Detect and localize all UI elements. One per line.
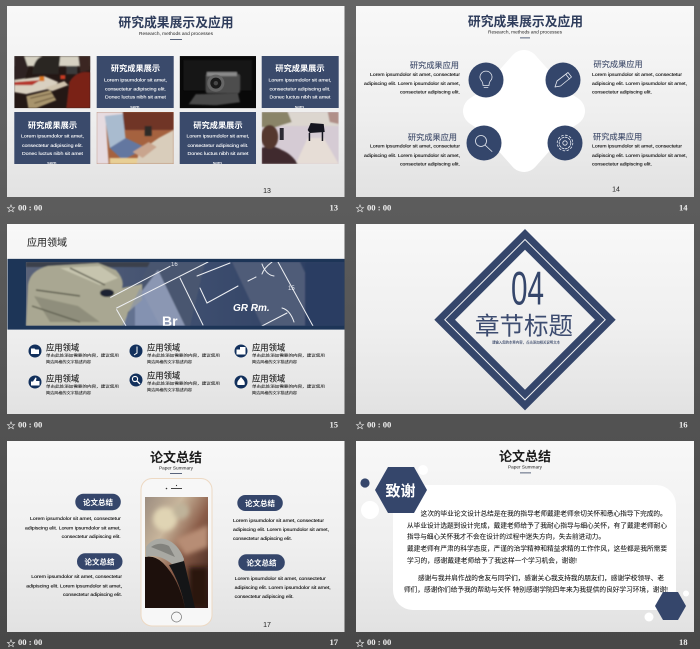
pill: upper right: 论文总结 — [245, 498, 275, 508]
text block: lower right: consectetur adipiscing elit. — [592, 162, 652, 168]
slide 13 subtitle: Research, methods and processes — [139, 31, 213, 36]
card: result 4: Donec luctus nibh sit amet — [188, 151, 249, 157]
slide 13 page number: 13 — [263, 188, 271, 195]
slide 18 footer: 00 : 00 — [367, 637, 391, 647]
pill: lower left — [77, 553, 122, 570]
card: result 3: Donec luctus nibh sit amet — [22, 151, 84, 157]
slide 17 subtitle: Paper Summary — [159, 466, 194, 470]
slide 13 footer — [7, 202, 338, 212]
banner photo: hand drawing floor plan: GR Rm. — [233, 303, 270, 314]
text block: lower left: Lorem ipsumdolor sit amet, consectetur — [31, 574, 122, 580]
text block: upper right — [233, 518, 329, 542]
acknowledgement text: 师们，感谢你们给予我的帮助与关怀 特别感谢学院四年来为我提供的良好学习环境，谢谢! — [404, 585, 668, 594]
decorative circle: lower white — [644, 612, 654, 622]
slide 18 — [356, 441, 694, 632]
slide 15 footer: 00 : 00 — [18, 420, 42, 430]
slide 13 footer: 13 — [330, 202, 338, 212]
text block: upper left — [364, 60, 460, 96]
pill: upper left: 论文总结 — [83, 497, 113, 507]
slide 16 footer — [356, 420, 688, 430]
hexagon badge: thanks — [375, 467, 427, 513]
text block: lower right: Lorem ipsumdolor sit amet, consectetur — [592, 144, 682, 150]
item: folder — [28, 342, 120, 364]
icon: gear — [548, 126, 582, 160]
hexagon: lower right — [655, 592, 686, 620]
slide 18 subtitle: Paper Summary — [508, 464, 543, 470]
card: result 1: Lorem ipsumdolor sit amet, — [104, 78, 167, 84]
slide 13 background — [7, 6, 344, 197]
slide 16 footer: 16 — [679, 420, 688, 430]
slide 14 page number: 14 — [612, 186, 620, 194]
pill: lower left: 论文总结 — [84, 556, 115, 566]
pill: upper left — [75, 494, 121, 510]
acknowledgement text: 从毕业设计选题到设计完成，戴建老师给予了我耐心指导与细心关怀，有了戴建老师耐心 — [407, 520, 668, 529]
white text panel — [393, 485, 676, 610]
slide 14 footer: 14 — [679, 202, 688, 212]
banner photo: hand drawing floor plan: Br — [162, 313, 178, 329]
slide 16 — [356, 224, 694, 414]
card: result 1: consectetur adipiscing elit. — [105, 86, 166, 92]
slide 14 title: 研究成果展示及应用 — [468, 14, 583, 29]
card: result 1: Donec luctus nibh sit amet — [105, 94, 167, 100]
text block: lower left: Lorem ipsumdolor sit amet, consectetur — [370, 144, 460, 150]
item: money bag — [234, 374, 326, 395]
item: clock: 单击此处添加需要的内容，建议您用 — [147, 352, 221, 358]
slide 17 footer — [7, 637, 339, 647]
card: result 1 — [97, 56, 174, 110]
banner photo: hand drawing floor plan: 16 — [171, 262, 178, 268]
decorative circle: white small — [418, 465, 428, 475]
decorative circle: right white — [683, 590, 689, 596]
text block: upper left: consectetur adipiscing elit. — [400, 90, 460, 96]
pill: lower right — [238, 554, 285, 571]
acknowledgement text: 这次的毕业论文设计总结是在我的指导老师戴建老师亲切关怀和悉心指导下完成的。 — [421, 509, 667, 518]
item: factory: 应用领域 — [252, 342, 285, 352]
text block: lower right — [592, 132, 687, 168]
slide 14 background — [356, 6, 694, 197]
slide 13 — [7, 6, 344, 197]
text block: lower left: consectetur adipiscing elit. — [400, 162, 460, 168]
slide 14 — [356, 6, 694, 197]
pill: lower right: 论文总结 — [246, 558, 277, 568]
slide 14 title underline — [520, 36, 530, 39]
slide 15 footer — [7, 420, 338, 430]
banner photo: hand drawing floor plan — [8, 258, 344, 330]
card: result 2: Lorem ipsumdolor sit amet, — [268, 78, 332, 84]
card: result 2 — [262, 56, 339, 110]
chapter subtitle: 请输入您的本章内容，点击添加相关说明文本 — [492, 340, 560, 344]
text block: upper right: consectetur adipiscing elit. — [592, 90, 652, 96]
item: money bag: 单击此处添加需要的内容，建议您用 — [252, 384, 326, 388]
text block: upper right: adipiscing elit. Lorem ipsumdolor sit amet, — [233, 527, 329, 533]
text block: upper right: 研究成果应用 — [594, 59, 643, 69]
item: thumbs up — [28, 374, 120, 395]
item: clock — [130, 342, 221, 364]
text block: upper right: adipiscing elit. Lorem ipsumdolor sit amet, — [592, 81, 687, 87]
text block: lower right: adipiscing elit. Lorem ipsumdolor sit amet, — [592, 153, 687, 159]
photo: laptop — [96, 112, 174, 164]
card: result 3: consectetur adipiscing elit. — [22, 143, 83, 149]
text block: upper left: 研究成果应用 — [410, 60, 459, 70]
item: search — [130, 370, 221, 392]
text block: upper left: Lorem ipsumdolor sit amet, consectetur — [30, 516, 121, 522]
slide 17 — [7, 441, 344, 632]
item: money bag: 简洁风格的文字描述内容 — [252, 390, 297, 395]
icon: magnifier — [466, 126, 502, 160]
slide 17 title: 论文总结 — [150, 450, 202, 465]
slide 14 footer: 00 : 00 — [367, 202, 391, 212]
item: search: 单击此处添加需要的内容，建议您用 — [147, 380, 221, 386]
text block: lower left: 研究成果应用 — [408, 132, 457, 142]
item: clock: 简洁风格的文字描述内容 — [147, 359, 192, 364]
slide 17 footer: 17 — [330, 637, 339, 647]
photo: people at desk — [14, 56, 90, 108]
slide 18 background — [356, 441, 694, 632]
item: clock: 应用领域 — [147, 342, 180, 352]
text block: upper left: Lorem ipsumdolor sit amet, consectetur — [370, 72, 460, 78]
card: result 4: consectetur adipiscing elit. — [188, 143, 248, 149]
banner photo: hand drawing floor plan: 15 — [288, 286, 295, 292]
chapter title: 章节标题 — [475, 312, 573, 340]
decorative circle: navy — [360, 478, 370, 488]
slide 15 heading: 应用领域 — [27, 236, 67, 249]
text block: lower left: adipiscing elit. Lorem ipsumdolor sit amet, — [26, 584, 122, 590]
pill: upper right — [237, 495, 283, 511]
hexagon badge: thanks: 致谢 — [385, 483, 416, 500]
item: thumbs up: 应用领域 — [46, 374, 79, 384]
acknowledgement text — [404, 509, 668, 594]
card: result 4: Lorem ipsumdolor sit amet, — [186, 134, 250, 140]
slide 14 footer — [356, 202, 688, 212]
item: folder: 简洁风格的文字描述内容 — [46, 359, 91, 364]
item: thumbs up: 单击此处添加需要的内容，建议您用 — [46, 384, 120, 388]
white quatrefoil shape — [478, 65, 570, 157]
text block: upper right — [592, 59, 687, 96]
item: factory: 简洁风格的文字描述内容 — [252, 359, 297, 364]
card: result 1: sem. — [130, 106, 141, 110]
slide 18 footer: 18 — [679, 637, 688, 647]
slide 13 title: 研究成果展示及应用 — [118, 15, 234, 30]
double diamond frame — [434, 229, 616, 410]
card: result 2: 研究成果展示 — [275, 63, 325, 73]
decorative circle: white large — [361, 501, 379, 519]
card: result 3: 研究成果展示 — [28, 120, 77, 130]
card: result 3: sem. — [47, 162, 58, 166]
item: search: 简洁风格的文字描述内容 — [147, 387, 192, 392]
text block: upper right: consectetur adipiscing elit. — [233, 536, 292, 542]
text block: upper left — [25, 516, 121, 540]
slide 17 page number: 17 — [263, 622, 271, 629]
card: result 4: 研究成果展示 — [193, 120, 243, 130]
card: result 4: sem. — [213, 162, 223, 166]
icon: pencil — [546, 62, 580, 98]
slide 17 background — [7, 441, 344, 632]
icon: light bulb — [468, 62, 504, 98]
text block: upper right: Lorem ipsumdolor sit amet, consectetur — [592, 72, 682, 78]
card: result 3: Lorem ipsumdolor sit amet, — [21, 134, 84, 140]
text block: upper right: Lorem ipsumdolor sit amet, consectetur — [233, 518, 324, 524]
slide 17 title underline — [170, 472, 182, 475]
slide 16 footer: 00 : 00 — [367, 420, 391, 430]
slide 15 background — [7, 224, 344, 414]
item: folder: 应用领域 — [46, 342, 79, 352]
card: result 2: sem. — [295, 106, 305, 110]
card: result 4 — [180, 112, 256, 166]
phone mockup — [141, 478, 212, 626]
slide 18 title underline — [520, 472, 531, 474]
item: money bag: 应用领域 — [252, 374, 285, 384]
item: factory — [234, 342, 326, 364]
text block: upper left: adipiscing elit. Lorem ipsumdolor sit amet, — [364, 81, 460, 87]
slide 15 footer: 15 — [330, 420, 338, 430]
slide 13 title underline — [170, 38, 182, 41]
acknowledgement text: 指导与细心关怀我才不会在设计的过程中迷失方向，失去前进动力。 — [407, 532, 605, 541]
item: thumbs up: 简洁风格的文字描述内容 — [46, 390, 91, 395]
slide 17 footer: 00 : 00 — [18, 637, 42, 647]
text block: lower right: 研究成果应用 — [593, 132, 642, 142]
text block: upper left: adipiscing elit. Lorem ipsumdolor sit amet, — [25, 526, 121, 532]
text block: lower left: consectetur adipiscing elit. — [63, 592, 122, 598]
photo: camera — [180, 56, 256, 108]
acknowledgement text: 戴建老师有严肃的科学态度，严谨的治学精神和精益求精的工作作风，这些都是我所需要 — [407, 544, 668, 553]
slide 18 title: 论文总结 — [499, 449, 551, 464]
slide 14 subtitle: Research, methods and processes — [488, 30, 562, 34]
slide 16 background — [356, 224, 694, 414]
card: result 2: consectetur adipiscing elit. — [270, 86, 330, 92]
photo: piano in plaza — [262, 112, 339, 164]
card: result 1: 研究成果展示 — [111, 63, 160, 73]
text block: lower right: Lorem ipsumdolor sit amet, consectetur — [235, 576, 326, 582]
text block: lower left — [26, 574, 122, 598]
text block: upper left: consectetur adipiscing elit. — [62, 534, 121, 540]
chapter number: 04 — [511, 262, 544, 315]
card: result 2: Donec luctus nibh sit amet — [270, 94, 331, 100]
slide 18 footer — [356, 637, 688, 647]
item: search: 应用领域 — [147, 370, 180, 380]
acknowledgement text: 感谢与我并肩作战的舍友与同学们，感谢关心我支持我的朋友们，感谢学校领导、老 — [418, 573, 665, 582]
text block: lower left — [364, 132, 460, 168]
slide 15 — [7, 224, 344, 414]
text block: lower right — [235, 576, 331, 600]
text block: lower right: consectetur adipiscing elit. — [235, 594, 294, 600]
item: folder: 单击此处添加需要的内容，建议您用 — [46, 352, 120, 358]
card: result 3 — [14, 112, 90, 166]
slide 13 footer: 00 : 00 — [18, 202, 42, 212]
acknowledgement text: 学习的，感谢戴建老师给予了我这样一个学习机会，谢谢! — [407, 556, 577, 565]
text block: lower left: adipiscing elit. Lorem ipsumdolor sit amet, — [364, 153, 460, 159]
item: factory: 单击此处添加需要的内容，建议您用 — [252, 352, 326, 358]
text block: lower right: adipiscing elit. Lorem ipsumdolor sit amet, — [235, 585, 331, 591]
